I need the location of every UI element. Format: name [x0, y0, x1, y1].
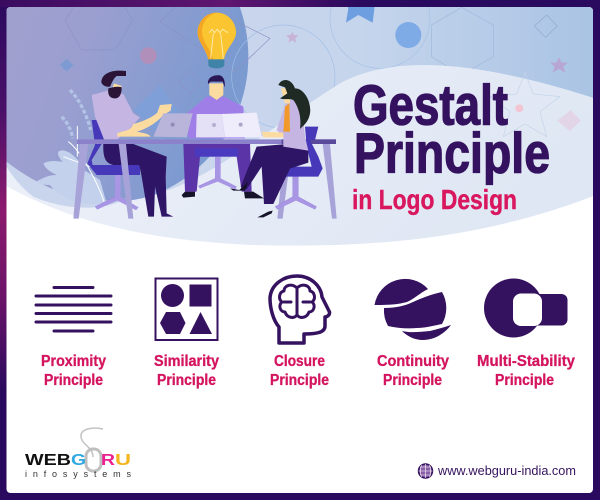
principle: closure [270, 276, 330, 389]
logo: webguru infosystems [25, 428, 132, 479]
icon: head with brain [270, 276, 330, 343]
swoosh shapes [490, 73, 581, 137]
logo wordmark [25, 452, 131, 469]
title [352, 74, 550, 215]
icon: circle and rounded rectangle [484, 278, 568, 338]
icon: similarity shapes [156, 278, 218, 340]
outline shapes over circle [65, 0, 335, 128]
label: similarity [154, 353, 219, 389]
logo wordmark: G [71, 452, 86, 469]
laptops [153, 113, 262, 137]
person: man with beard [87, 71, 173, 217]
table [73, 139, 337, 219]
label: continuity [377, 353, 449, 389]
label: closure: Closure [274, 353, 325, 370]
label: similarity: Similarity [154, 353, 219, 370]
person: man in the middle [182, 75, 264, 198]
label: proximity: Proximity [41, 353, 106, 370]
label: multi-stability [477, 353, 575, 389]
label: proximity [41, 353, 106, 389]
person: woman [230, 80, 323, 217]
principle: continuity [374, 279, 451, 389]
chair man [87, 120, 140, 210]
logo wordmark: WEB [25, 452, 71, 469]
logo tagline: infosystems [25, 469, 132, 479]
logo wordmark: U [115, 452, 131, 469]
label: similarity: Principle [157, 372, 216, 389]
hero illustration panel [6, 7, 593, 246]
subtitle: in Logo Design [352, 184, 517, 215]
website link [418, 463, 576, 478]
label: proximity: Principle [44, 372, 103, 389]
icon: split circle [374, 279, 451, 340]
logo wordmark: R [101, 452, 116, 469]
principle: similarity [154, 278, 219, 389]
icon: light bulb [198, 13, 236, 68]
principle: multi-stability [477, 278, 575, 389]
title line: Gestalt: Gestalt [353, 74, 508, 138]
icon: plant [36, 90, 107, 204]
icon: globe [418, 464, 432, 478]
label: closure [270, 353, 329, 389]
website url: www.webguru-india.com [437, 463, 576, 478]
light swoosh [0, 65, 600, 253]
hero background [6, 7, 593, 195]
principle: proximity [36, 288, 111, 389]
background shapes [286, 7, 568, 72]
label: multi-stability: Principle [495, 372, 554, 389]
title line: Principle: Principle [354, 122, 550, 186]
label: closure: Principle [270, 372, 329, 389]
label: continuity: Principle [383, 372, 442, 389]
icon: mouse [81, 428, 103, 471]
icon: proximity lines [36, 288, 111, 331]
white lower section [6, 186, 593, 254]
large circle backdrop [0, 0, 248, 205]
label: multi-stability: Multi-Stability [477, 353, 575, 370]
label: continuity: Continuity [377, 353, 449, 370]
